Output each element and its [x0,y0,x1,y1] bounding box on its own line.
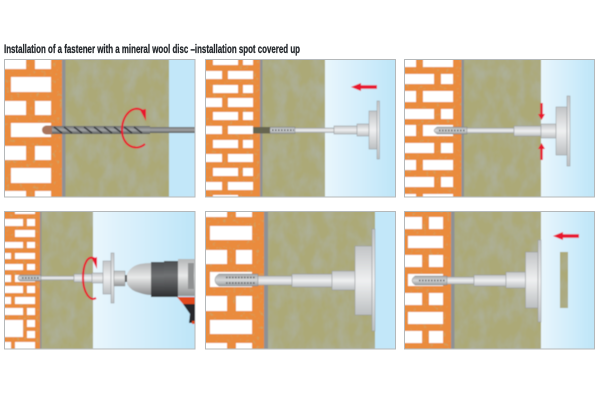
rotation arrow [122,109,146,148]
plaster layer [451,211,454,349]
brick wall [404,211,452,349]
brick wall [205,59,260,197]
air gap [325,59,396,197]
panel: step 1 drilling the hole [4,59,196,197]
mineral wool [454,211,541,349]
air gap [93,211,195,349]
mineral wool [66,59,169,197]
plaster layer [462,59,464,197]
panel frame 2 [206,60,396,197]
compress arrow top [538,103,545,120]
panel: step 2 inserting the fastener [205,59,396,197]
mineral wool [464,59,541,197]
brick wall [404,59,462,197]
panel frame 3 [404,60,594,197]
brick wall [4,59,62,197]
panel: step 3 fastener seated against wool [404,59,595,197]
drilled hole [253,127,270,134]
mineral wool [262,59,325,197]
wool disc [560,252,568,308]
rotation arrow [83,257,97,299]
compress arrow bottom [538,143,545,160]
plaster layer [260,59,262,197]
air gap [375,211,396,349]
mineral wool [42,211,93,349]
drill bit [42,126,196,134]
air gap [541,211,595,349]
panel: step 6 covering with wool disc [404,211,595,349]
push arrow [553,232,579,240]
plaster layer [40,211,42,349]
cordless drill [114,259,196,324]
brick wall [4,211,40,349]
plaster layer [264,211,268,349]
mineral wool [268,211,375,349]
fastener [215,229,375,331]
panel: step 5 anchor expanded [205,211,396,349]
plaster layer [62,59,66,197]
panel frame 6 [404,212,594,349]
air gap [541,59,595,197]
fastener [270,101,380,159]
panel frame 1 [4,60,195,197]
panel frame 4 [4,212,195,349]
fastener [18,253,114,303]
fastener [434,96,570,166]
title: Installation of a fastener with a mineral wool disc –installation spot covered up [4,44,300,56]
brick wall [205,211,264,349]
push arrow [351,83,377,91]
fastener [412,240,541,322]
panel frame 5 [206,212,396,349]
panel: step 4 screwing with the drill [4,211,196,349]
air gap [169,59,195,197]
